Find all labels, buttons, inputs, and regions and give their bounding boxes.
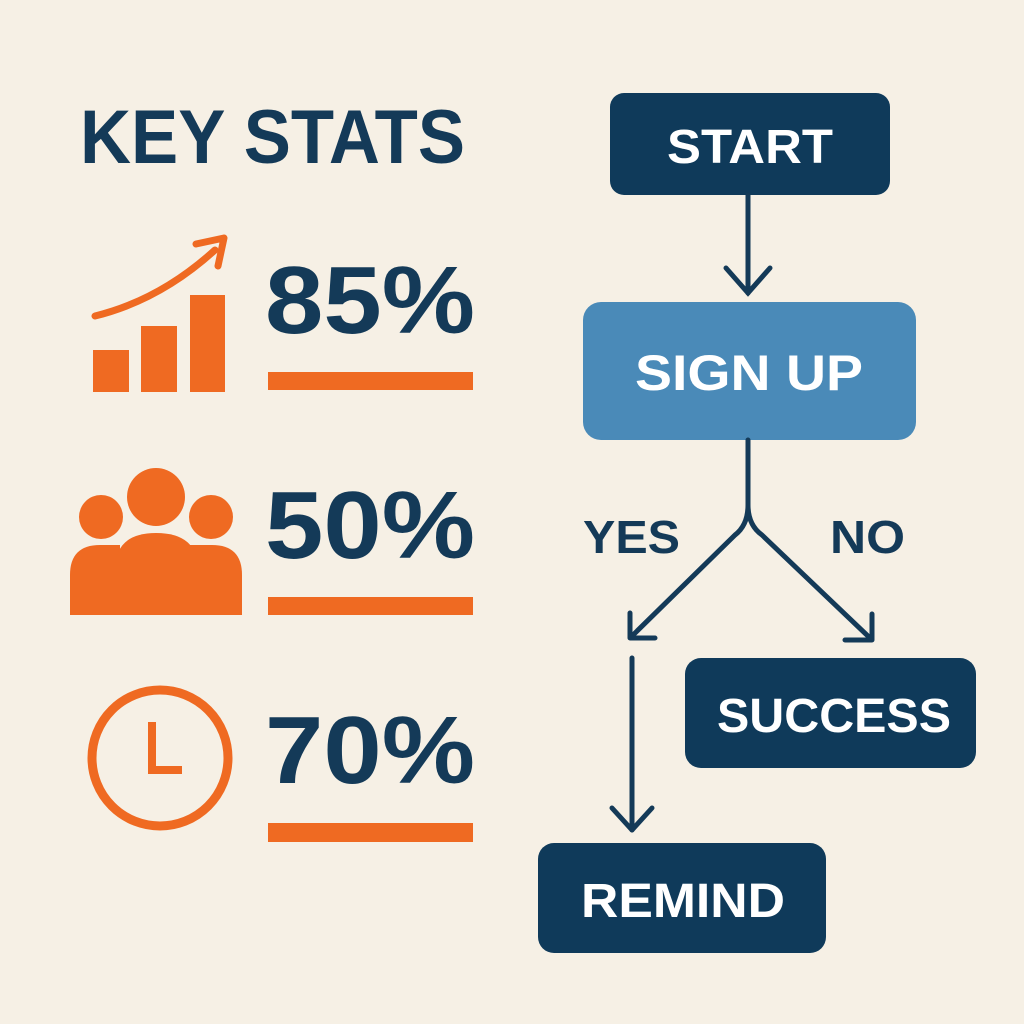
arrow: branch <box>612 440 872 830</box>
label: YES: YES <box>583 511 680 563</box>
box: START <box>610 93 890 195</box>
box: SUCCESS: SUCCESS <box>717 690 951 743</box>
box: SUCCESS <box>685 658 976 768</box>
box: REMIND: REMIND <box>581 875 785 928</box>
stat: 70%: 70% <box>265 697 475 804</box>
stat: 85% <box>265 247 475 390</box>
box: SIGN UP: SIGN UP <box>635 345 863 401</box>
box: START: START <box>667 121 833 174</box>
arrow: start to sign up <box>726 195 770 293</box>
label: NO: NO <box>830 511 905 563</box>
icon: clock <box>92 690 228 826</box>
title: KEY STATS <box>80 95 465 180</box>
box: REMIND <box>538 843 826 953</box>
icon: growth bar chart <box>93 238 225 392</box>
stat: 50% <box>265 472 475 615</box>
icon: people <box>70 468 242 615</box>
box: SIGN UP <box>583 302 916 440</box>
stat: 50%: 50% <box>265 472 475 579</box>
stat: 70% <box>265 697 475 842</box>
stat: 85%: 85% <box>265 247 475 354</box>
